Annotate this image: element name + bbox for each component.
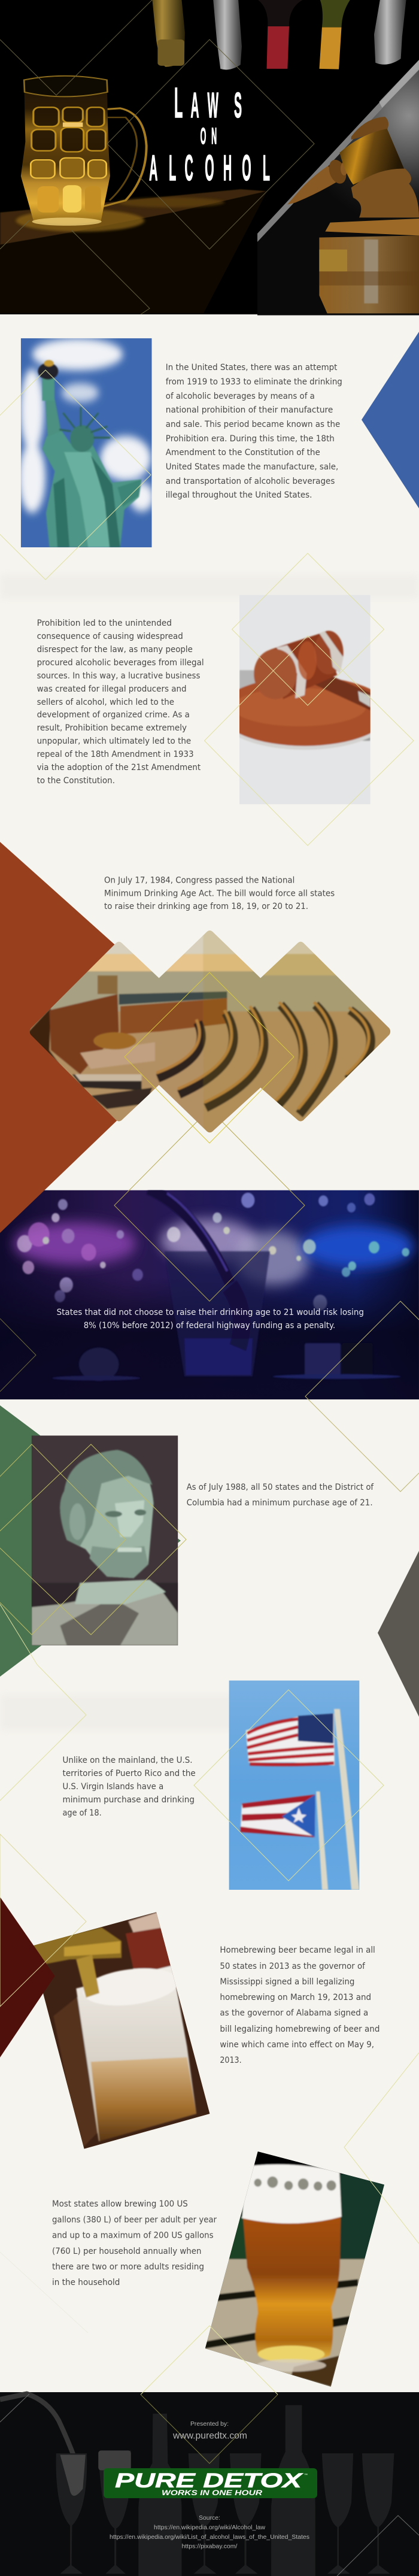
- hero panel: [0, 0, 419, 316]
- title: ALCOHOL: [149, 149, 270, 188]
- text: intro paragraph: of alcoholic beverages by means of a: [166, 392, 315, 401]
- text: territories: Unlike on the mainland, the U.S.: [62, 1756, 193, 1765]
- icon: faint glasses and bottles: [0, 2394, 394, 2576]
- text: consequences paragraph: disrespect for the law, as many people: [37, 645, 193, 654]
- photo: red wooden gavel: [239, 595, 371, 804]
- decorative dark red shape: [0, 1897, 55, 2057]
- text: brewing limits: Most states allow brewing 100 US: [52, 2199, 188, 2209]
- text: consequences paragraph: development of organized crime. As a: [37, 710, 190, 720]
- text: highway funding penalty: 8% (10% before 2012) of federal highway funding as a penalty.: [84, 1321, 335, 1331]
- text: sources: https://en.wikipedia.org/wiki/Alcohol_law: [154, 2524, 265, 2531]
- text: homebrewing: Homebrewing beer became legal in all: [220, 1945, 375, 1955]
- text: homebrewing: homebrewing on March 19, 2013 and: [220, 1993, 371, 2002]
- text: brewing limits: there are two or more adults residing: [52, 2262, 204, 2272]
- text: sources: Source:: [199, 2514, 220, 2522]
- decorative hero diamonds: [0, 0, 314, 314]
- photo: statue of liberty: [19, 338, 154, 547]
- panel: homebrewing legal: [0, 1834, 379, 2153]
- text: intro paragraph: In the United States, there was an attempt: [166, 363, 338, 372]
- decorative green shape: [0, 1405, 181, 1677]
- photo: parliament chamber in zigzag frame: [27, 928, 393, 1136]
- photo: pouring drink with bokeh: [0, 1189, 419, 1399]
- logo: pure detox: PURE DETOX: [115, 2469, 303, 2492]
- panel: brewing limits: [0, 2053, 419, 2392]
- text: consequences paragraph: unpopular, which ultimately led to the: [37, 737, 191, 746]
- title: [149, 80, 270, 188]
- photo: lincoln statue: [32, 1435, 178, 1645]
- panel: prohibition intro: [0, 332, 419, 580]
- text: brewing limits: [52, 2199, 217, 2287]
- icon: ledge under the mug: [0, 189, 267, 314]
- icon: row of bottle necks: [152, 0, 406, 69]
- glass: [165, 1251, 270, 1377]
- panel: all 50 states 1988: [0, 1405, 419, 1717]
- text: intro paragraph: and sale. This period became known as the: [166, 420, 340, 429]
- text: consequences paragraph: consequence of causing widespread: [37, 632, 183, 641]
- text: 1988 minimum age: Columbia had a minimum purchase age of 21.: [187, 1498, 373, 1508]
- text: territories: minimum purchase and drinking: [62, 1795, 195, 1805]
- photo: glass of amber beer: [205, 2151, 384, 2387]
- text: consequences paragraph: result, Prohibition became extremely: [37, 723, 187, 733]
- text: 1984 act: [104, 875, 335, 911]
- ice cubes: [79, 1347, 119, 1381]
- text: 1988 minimum age: As of July 1988, all 50 states and the District of: [187, 1483, 374, 1492]
- text: presented by: Presented by:: [190, 2420, 229, 2427]
- text: consequences paragraph: sellers of alcohol, which led to the: [37, 698, 174, 707]
- logo: pure detox: [104, 2468, 317, 2498]
- title: ON: [201, 123, 217, 149]
- decorative grey shape: [378, 1551, 419, 1717]
- text: presented by: [172, 2420, 247, 2441]
- text: presented by: www.puredtx.com: [172, 2431, 247, 2441]
- text: territories: age of 18.: [62, 1808, 102, 1818]
- text: homebrewing: [220, 1945, 379, 2065]
- text: intro paragraph: illegal throughout the United States.: [166, 490, 312, 500]
- text: intro paragraph: [166, 363, 342, 500]
- text: intro paragraph: Prohibition era. During this time, the 18th: [166, 434, 335, 444]
- text: highway funding penalty: [57, 1308, 364, 1331]
- gavel head: [339, 117, 419, 217]
- panel: us territories: [0, 1604, 384, 1890]
- text: 1984 act: to raise their drinking age from 18, 19, or 20 to 21.: [104, 902, 308, 911]
- text: homebrewing: wine which came into effect on May 9,: [220, 2040, 374, 2050]
- text: consequences paragraph: via the adoption of the 21st Amendment: [37, 763, 201, 772]
- text: consequences paragraph: was created for illegal producers and: [37, 684, 187, 694]
- logo: pure detox: WORKS IN ONE HOUR: [162, 2490, 263, 2497]
- text: territories: U.S. Virgin Islands have a: [62, 1782, 163, 1792]
- text: sources: https://pixabay.com/: [182, 2543, 238, 2550]
- text: homebrewing: as the governor of Alabama signed a: [220, 2008, 368, 2018]
- text: homebrewing: 50 states in 2013 as the governor of: [220, 1962, 366, 1971]
- gavel sound block: [319, 219, 419, 313]
- decorative brown triangle: [0, 842, 211, 1233]
- text: intro paragraph: from 1919 to 1933 to eliminate the drinking: [166, 377, 342, 387]
- icon: beer mug: [21, 76, 147, 226]
- gavel handle and knob: [287, 157, 350, 205]
- text: territories: territories of Puerto Rico and the: [62, 1769, 196, 1778]
- text: highway funding penalty: States that did not choose to raise their drinking age to 21 would risk losing: [57, 1308, 364, 1317]
- panel: national minimum drinking age act: [0, 842, 393, 1233]
- panel: unintended consequences: [37, 553, 414, 845]
- text: 1984 act: On July 17, 1984, Congress passed the National: [104, 875, 294, 885]
- text: brewing limits: (760 L) per household annually when: [52, 2247, 201, 2256]
- text: brewing limits: gallons (380 L) of beer per adult per year: [52, 2216, 217, 2225]
- icon: gavel on grey panel: [257, 60, 419, 316]
- text: consequences paragraph: to the Constitution.: [37, 776, 115, 786]
- text: intro paragraph: Amendment to the Constitution of the: [166, 448, 320, 457]
- text: sources: [110, 2514, 309, 2550]
- title: AWS: [190, 86, 242, 125]
- text: 1988 minimum age: [187, 1483, 374, 1508]
- photo: us and puerto rico flags: [229, 1681, 359, 1890]
- text: consequences paragraph: repeal of the 18th Amendment in 1933: [37, 750, 194, 759]
- text: sources: https://en.wikipedia.org/wiki/List_of_alcohol_laws_of_the_United_States: [110, 2533, 309, 2541]
- text: homebrewing: 2013.: [220, 2056, 242, 2065]
- text: intro paragraph: and transportation of alcoholic beverages: [166, 477, 335, 486]
- text: homebrewing: Mississippi signed a bill legalizing: [220, 1977, 354, 1987]
- text: consequences paragraph: Prohibition led to the unintended: [37, 619, 172, 628]
- text: consequences paragraph: procured alcoholic beverages from illegal: [37, 658, 204, 668]
- text: consequences paragraph: [37, 619, 204, 786]
- text: intro paragraph: national prohibition of their manufacture: [166, 405, 333, 415]
- logo: pure detox: ™: [304, 2473, 308, 2477]
- photo: beer being poured from tap: [27, 1909, 214, 2153]
- text: territories: [62, 1756, 196, 1818]
- decorative blue triangle: [362, 332, 419, 508]
- text: 1984 act: Minimum Drinking Age Act. The bill would force all states: [104, 889, 335, 898]
- text: brewing limits: and up to a maximum of 200 US gallons: [52, 2231, 214, 2241]
- text: homebrewing: bill legalizing homebrewing of beer and: [220, 2025, 379, 2034]
- panel: dark drink photo with penalty text: [0, 1109, 419, 1492]
- panel: footer: [0, 2326, 419, 2576]
- text: intro paragraph: United States made the manufacture, sale,: [166, 462, 338, 472]
- text: brewing limits: in the household: [52, 2278, 120, 2287]
- title: L: [174, 80, 183, 127]
- text: consequences paragraph: sources. In this way, a lucrative business: [37, 671, 200, 681]
